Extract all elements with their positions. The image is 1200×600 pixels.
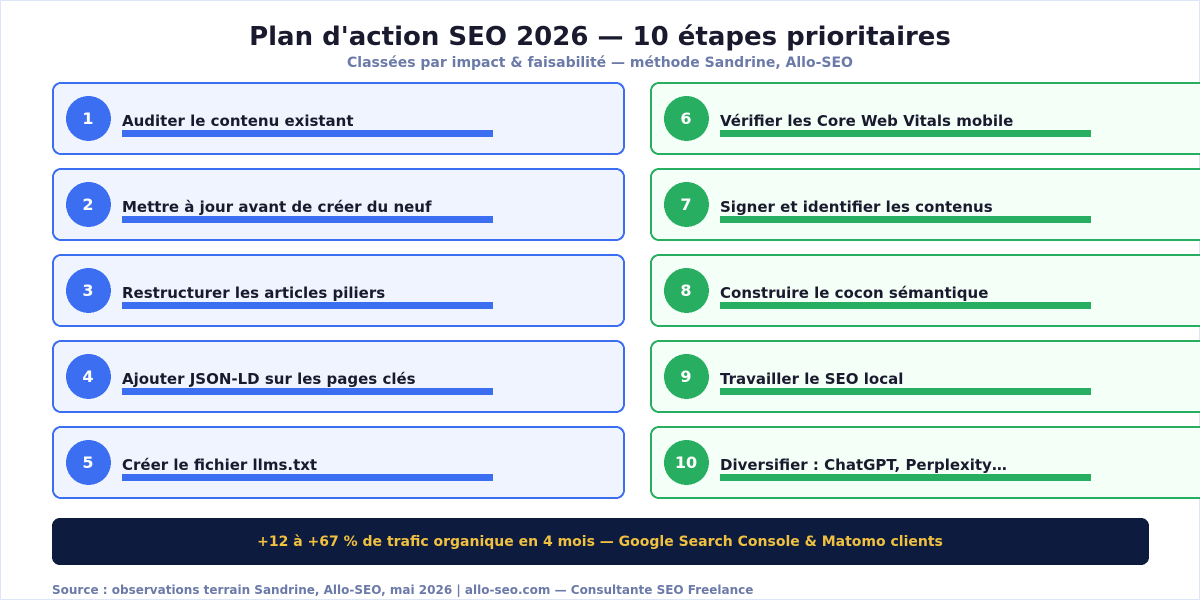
step card 10 (651, 427, 1200, 498)
step card 8 (651, 255, 1200, 326)
results banner: +12 à +67 % de trafic organique en 4 mois — Google Search Console & Matomo clients (257, 534, 943, 550)
step card 10: Diversifier : ChatGPT, Perplexity… (720, 456, 1007, 474)
step card 4: Ajouter JSON-LD sur les pages clés (122, 370, 416, 388)
step card 9: Travailler le SEO local (720, 370, 903, 388)
step card 7: 7 (680, 195, 692, 214)
title: Plan d'action SEO 2026 — 10 étapes prioritaires (249, 22, 951, 52)
step card 9: 9 (680, 367, 692, 386)
step card 3 (53, 255, 624, 326)
step card 1: 1 (82, 109, 94, 128)
step card 5: 5 (82, 453, 94, 472)
step card 2: 2 (82, 195, 94, 214)
step card 3: Restructurer les articles piliers (122, 284, 385, 302)
step card 2 (53, 169, 624, 240)
step card 10: 10 (675, 453, 697, 472)
step card 3: 3 (82, 281, 94, 300)
step card 6: 6 (680, 109, 692, 128)
step card 9 (651, 341, 1200, 412)
step card 4 (53, 341, 624, 412)
step card 4: 4 (82, 367, 94, 386)
results banner (52, 518, 1149, 565)
source footer: Source : observations terrain Sandrine, Allo-SEO, mai 2026 | allo-seo.com — Consultante SEO Freelance (52, 583, 753, 597)
step card 5: Créer le fichier llms.txt (122, 456, 317, 474)
step card 7 (651, 169, 1200, 240)
step card 1 (53, 83, 624, 154)
step card 2: Mettre à jour avant de créer du neuf (122, 198, 432, 216)
subtitle: Classées par impact & faisabilité — méthode Sandrine, Allo-SEO (347, 55, 853, 71)
step card 1: Auditer le contenu existant (122, 112, 354, 130)
step card 7: Signer et identifier les contenus (720, 198, 993, 216)
step card 8: 8 (680, 281, 692, 300)
step card 6 (651, 83, 1200, 154)
step card 5 (53, 427, 624, 498)
step card 6: Vérifier les Core Web Vitals mobile (720, 112, 1013, 130)
step card 8: Construire le cocon sémantique (720, 284, 988, 302)
